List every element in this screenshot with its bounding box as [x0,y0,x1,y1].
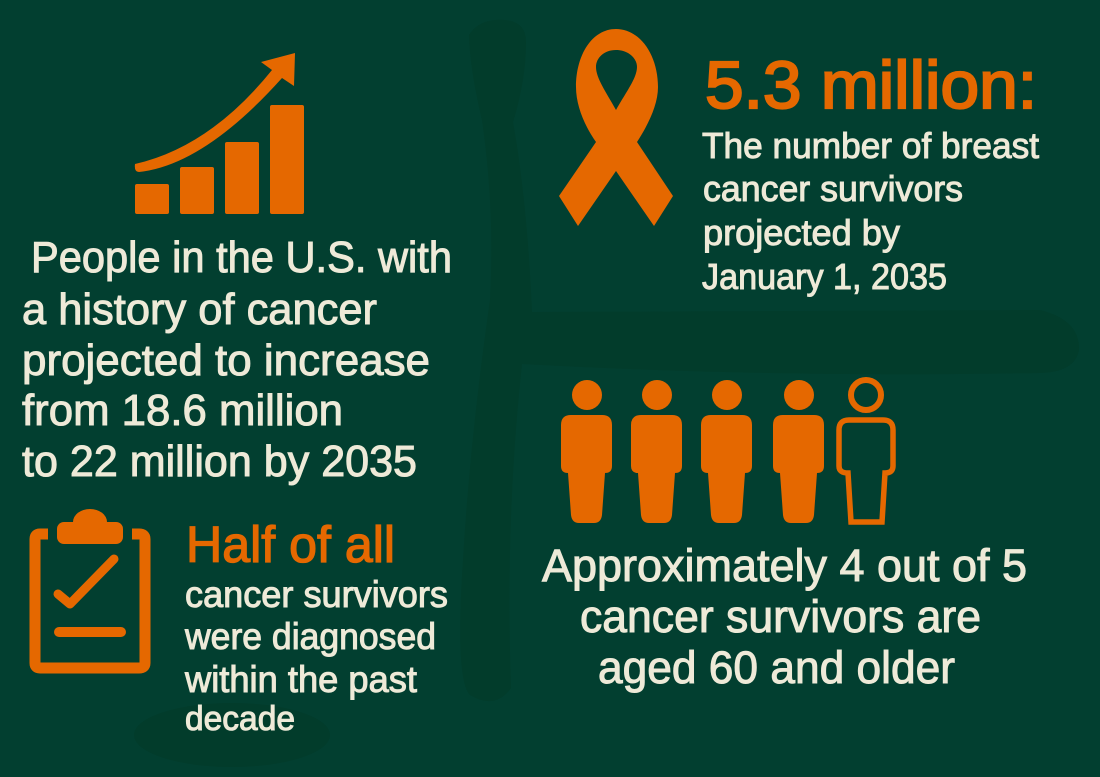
text: people with cancer history: from 18.6 million [22,386,343,435]
heading: 5.3 million: 5.3 million: [705,48,1037,123]
text: breast cancer survivors: projected by [703,212,900,253]
text: four out of five [542,540,1027,693]
icon: rising bar chart with arrow [135,53,304,214]
text: people with cancer history: to 22 million by 2035 [22,437,417,486]
icon: clipboard with checkmark [35,509,145,668]
text: half of survivors: within the past [184,659,418,700]
text: breast cancer survivors: The number of breast [702,125,1039,166]
icon: awareness ribbon [559,29,673,226]
text: breast cancer survivors: January 1, 2035 [702,256,947,297]
text: four out of five: Approximately 4 out of 5 [542,540,1027,591]
icon: people four of five [561,380,893,523]
text: people with cancer history: projected to increase [22,336,430,385]
text: four out of five: cancer survivors are [580,591,981,642]
text: four out of five: aged 60 and older [598,642,955,693]
text: breast cancer survivors: cancer survivors [703,168,963,209]
heading: half of all: Half of all [186,516,395,573]
text: people with cancer history: a history of cancer [22,285,377,334]
text: half of survivors: cancer survivors [185,574,448,615]
text: half of survivors: were diagnosed [184,616,436,657]
text: people with cancer history: People in the U.S. with [31,233,452,282]
text: breast cancer survivors [702,125,1039,297]
text: half of survivors [184,574,448,738]
text: people with cancer history [22,233,452,486]
text: half of survivors: decade [185,700,295,738]
